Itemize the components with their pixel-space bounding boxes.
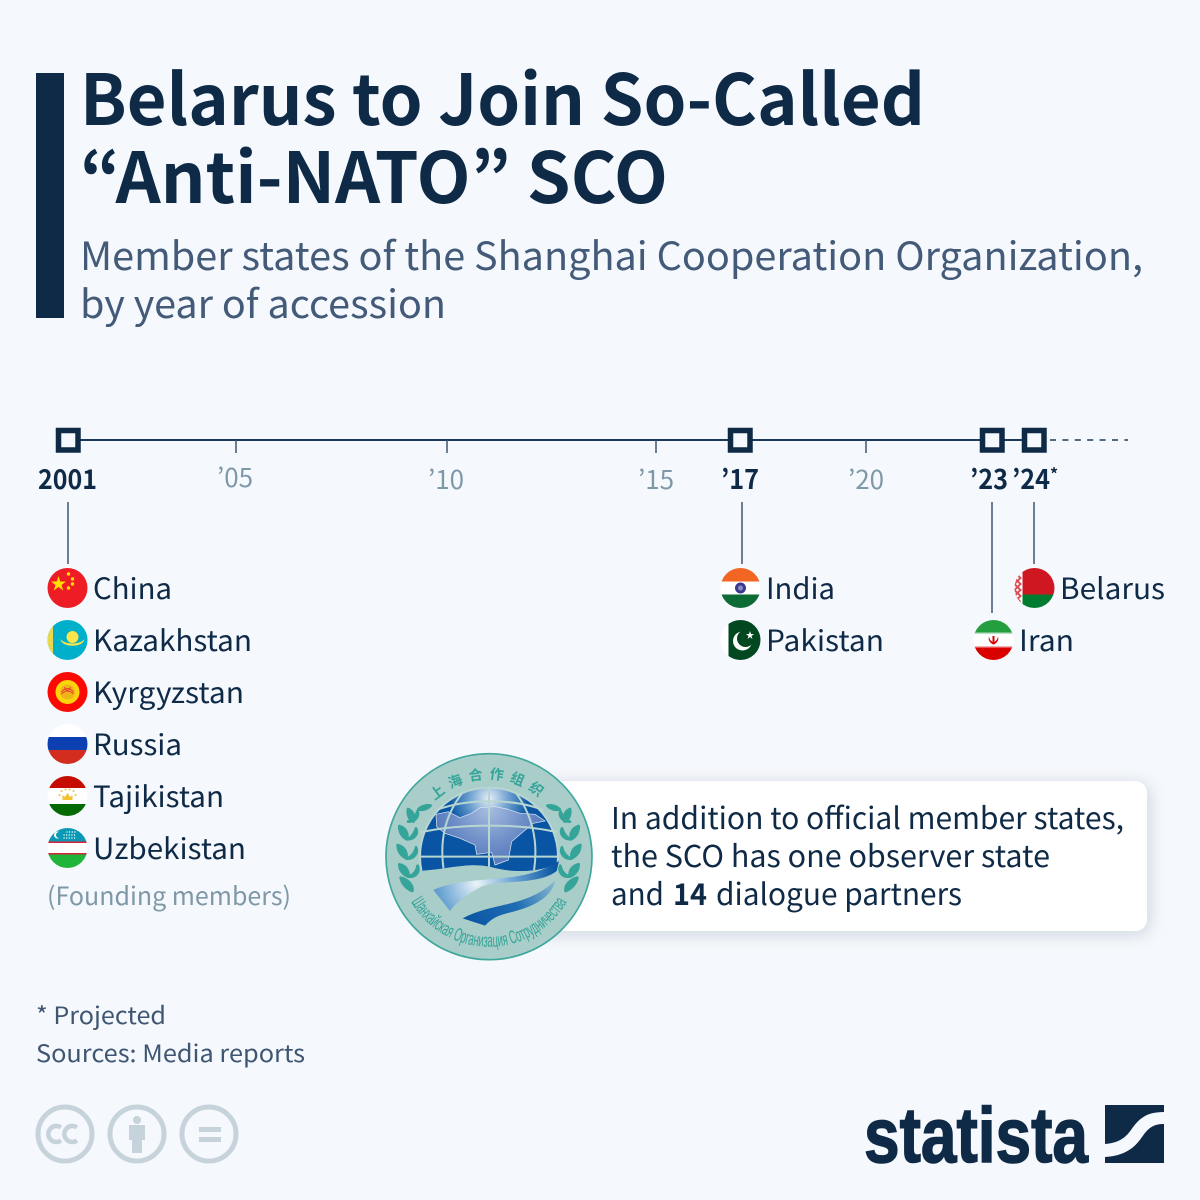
year labels: ’20 [848, 460, 884, 497]
flag: Pakistan [720, 620, 760, 660]
label: Kazakhstan: Kazakhstan [93, 618, 252, 660]
title accent bar [36, 73, 64, 318]
wordmark: statista [864, 1091, 1088, 1179]
footnote and source: * Projected [36, 996, 166, 1031]
icon: attribution [110, 1107, 164, 1161]
title: Belarus to Join So-Called [80, 45, 925, 146]
year labels: ’23 [970, 458, 1008, 497]
callout card [530, 781, 1147, 931]
title: “Anti-NATO” SCO [80, 123, 668, 224]
callout text: In addition to official member states, [611, 794, 1124, 838]
label: Uzbekistan: Uzbekistan [93, 826, 246, 868]
footnote and source: Sources: Media reports [36, 1034, 305, 1069]
icon: statista mark [1105, 1105, 1164, 1163]
flag: Uzbekistan [48, 828, 88, 868]
year labels: * [1050, 461, 1058, 485]
label: Belarus: Belarus [1060, 566, 1165, 608]
emblem swooshes [433, 861, 559, 911]
connector lines [68, 502, 1034, 613]
SCO emblem [385, 752, 593, 960]
callout text: and [611, 870, 664, 914]
flag: Belarus [1014, 568, 1054, 608]
year labels: ’05 [217, 458, 253, 495]
icon: no derivatives [182, 1107, 236, 1161]
flag: India [720, 568, 760, 608]
flag: Russia [48, 724, 88, 764]
flag: Kyrgyzstan [48, 672, 88, 712]
footnote and source [36, 996, 305, 1069]
flag: China [48, 568, 88, 608]
callout text: the SCO has one observer state [611, 832, 1050, 876]
flag: Kazakhstan [48, 620, 88, 660]
note: founding members: (Founding members) [47, 877, 291, 913]
year labels [38, 458, 1058, 497]
callout [385, 752, 1156, 960]
year labels: 2001 [38, 458, 97, 497]
label: Iran: Iran [1019, 618, 1074, 660]
label: Kyrgyzstan: Kyrgyzstan [93, 670, 244, 712]
statista logo [864, 1091, 1164, 1179]
subtitle: Member states of the Shanghai Cooperation Organization, [80, 226, 1143, 282]
licence icons [38, 1107, 236, 1161]
flag: Tajikistan [48, 776, 88, 816]
year labels: ’17 [721, 458, 759, 497]
emblem Chinese text: 上海合作组织 [432, 767, 544, 800]
label: China: China [93, 566, 172, 608]
emblem Russian text: Шанхайская Организация Сотрудничества [411, 896, 567, 950]
icon: cc [38, 1107, 92, 1161]
label: Pakistan: Pakistan [766, 618, 884, 660]
year labels: ’24 [1012, 458, 1050, 497]
year labels: ’10 [428, 460, 464, 497]
label: Tajikistan: Tajikistan [93, 774, 224, 816]
emblem globe [419, 786, 559, 871]
timeline axis [58, 430, 1128, 453]
callout text: 14 [673, 870, 707, 914]
flag: Iran [974, 620, 1014, 660]
subtitle: by year of accession [80, 274, 446, 330]
year labels: ’15 [638, 460, 674, 497]
callout text: dialogue partners [716, 870, 962, 914]
emblem laurels [398, 805, 580, 891]
label: Russia: Russia [93, 722, 182, 764]
label: India: India [766, 566, 835, 608]
